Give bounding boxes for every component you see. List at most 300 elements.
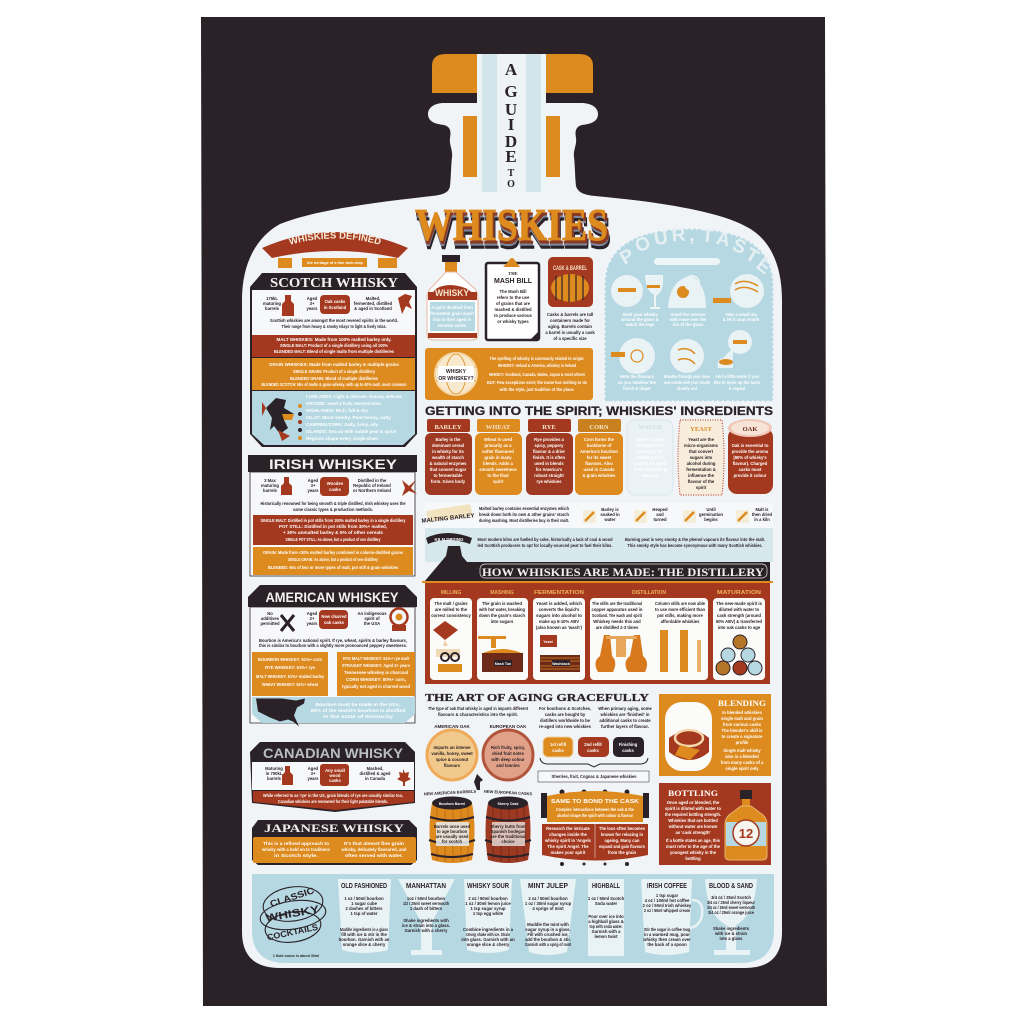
heading: irish whiskey [248, 455, 417, 472]
section: scotch regions with map: SPEYSIDE: Sweet & fruity. Honeyed notes [306, 401, 382, 406]
title ribbon: A Guide To: G [504, 82, 518, 101]
text and pot stills: Scotland. The wash and spirit [592, 613, 643, 618]
jar: rye: RYE [542, 424, 556, 431]
text: japanese note: often served with water. [345, 853, 403, 858]
icon: cask and barrels: a barrel is usually a cask [545, 330, 595, 335]
circle: european oak: dried fruit notes [492, 751, 525, 756]
jar: wheat: smooth sweetness [479, 467, 517, 472]
section: single malt and pot still: + 30% unmalted barley & 5% of other cereals [283, 530, 384, 535]
icon: cask the cask text panel: alcohol shape the spirit with colour & flavour [557, 813, 633, 818]
icon: whisky bottle label: WHISKY [435, 288, 469, 298]
step 2 illustration [668, 276, 707, 327]
barrel: european oak barrel: are the traditional [490, 834, 526, 839]
barrel: american oak barrel [424, 789, 476, 863]
circle: european oak: and tannins [496, 763, 520, 768]
malting steps: in a kiln [754, 517, 770, 522]
column: mashing: down the grain's starch [479, 613, 525, 618]
section: american styles right: Tennessee whiskey is charcoal [344, 670, 408, 675]
icon: arrow between circles and barrels [474, 774, 483, 790]
jar: rye: for America's [536, 467, 563, 472]
step 3 illustration [713, 274, 764, 322]
step 1 illustration: Swirl your whisky [622, 312, 658, 317]
jar: wheat: grain in many [484, 455, 512, 460]
column: maturation: The new-made spirit is [716, 601, 763, 606]
jar: corn: America's bourbon [580, 449, 618, 454]
section: american map and note: Bourbon must be made in the USA, [316, 702, 400, 707]
title ribbon: A Guide To: A [505, 60, 518, 79]
cocktail: mint julep: 2 oz / 50ml bourbon [528, 896, 568, 901]
icon row: american facts: An indigenous [357, 611, 387, 616]
icon: globe [435, 353, 477, 395]
icon row: irish facts: 3 Max [264, 478, 276, 483]
icon: mash bill clipboard: mashed & distilled [494, 307, 532, 312]
column: maturation: cask strength (around [717, 613, 761, 618]
jar: water: mashing, for [637, 449, 663, 454]
step 1 illustration [611, 275, 662, 327]
text: japanese note: whisky with a hold on to traditions [261, 847, 331, 852]
text: spelling explanation: WHISKY: Scotland, Canada, Wales, Japan & most others [489, 372, 586, 377]
text: oak types intro [428, 706, 529, 717]
icon row: irish facts: or Northern Ireland [353, 488, 391, 493]
jar: barley: BARLEY [434, 424, 462, 431]
barrel: american oak barrel: for scotch [442, 839, 463, 844]
section: american map and note: 95% of the world's bourbon is distilled [310, 708, 406, 713]
cocktail: mint julep [520, 879, 576, 955]
step 1 illustration: watch the legs [625, 322, 655, 327]
jar: rye: robust straight [534, 473, 564, 478]
malting steps: then dried [752, 512, 773, 517]
text: spelling explanation: The spelling of whisky is commonly related to origin: [490, 356, 584, 361]
barrel: european oak barrel: Sherry Cask [498, 802, 518, 806]
text and column stills: Column stills are now able [655, 601, 706, 606]
barrel: european oak barrel: Sherry butts from [490, 824, 526, 829]
malting steps [583, 507, 773, 523]
cocktail: blood and sand [705, 879, 757, 955]
icon row: canadian facts: Maturing [265, 766, 283, 771]
icon row: canadian facts: distilled & aged [360, 771, 391, 776]
jar: oak: OAK [743, 426, 757, 433]
intro text [270, 318, 398, 329]
section: grain whiskies: BLENDED SCOTCH: Mix of malts & grain whisky, with up to 40% malt, most common [262, 382, 407, 387]
emblem: classic whisky cocktails: CLASSIC [269, 885, 316, 909]
text: bottling notes [665, 800, 721, 861]
icon row: canadian facts: barrels [267, 776, 282, 781]
text: casks intro: further layers of flavour. [601, 724, 649, 729]
cocktail: manhattan: 1oz / 50ml bourbon [407, 896, 446, 901]
heading: pour, taste: T [741, 244, 762, 268]
jar: oak: (80% of whisky's [733, 455, 767, 460]
malting steps: Malt is [755, 507, 769, 512]
panel: scotch whisky [250, 273, 417, 447]
text: bottling notes: must refer to the age of the [666, 844, 721, 849]
icon row: scotch facts: & aged in Scotland [354, 306, 392, 311]
text: spelling explanation [487, 356, 587, 392]
section: american styles left: RYE WHISKEY: 51%+ rye [265, 665, 316, 670]
icon row: canadian facts: Mashed, [367, 766, 383, 771]
malting steps: germination [699, 512, 723, 517]
malting steps: Heaped [652, 507, 668, 512]
jar: water: WATER [638, 424, 662, 431]
jar: rye: Rye provides a [534, 437, 565, 442]
intro text: Historically renowned for being smooth & triple distilled, Irish whiskey uses the [260, 501, 406, 506]
jar: wheat: softer flavoured [482, 449, 514, 454]
jar: corn: backbone of [587, 443, 612, 448]
cocktail: blood and sand: 3/4 oz / 25ml cherry liqueur [707, 900, 755, 905]
icon row: irish facts: 3+ [311, 483, 316, 488]
circle: american oak: flavours [444, 763, 461, 768]
icon row: american facts: oak casks [324, 620, 345, 625]
section: american styles right: CORN WHISKEY: 80%+ corn, [346, 677, 406, 682]
jar: barley: Barley is the [436, 437, 461, 442]
icon: whisky bottle label: A spirit distilled from [431, 305, 473, 310]
jar: oak: casks must [739, 467, 762, 472]
icon row: canadian facts [265, 764, 411, 786]
title: Whiskies: WHISKIES [417, 207, 611, 258]
icon: cask and barrels: Casks & barrels are tall [547, 312, 593, 317]
text: japanese note: It's that almost fine grain [344, 841, 405, 846]
text: kiln left: Most modern kilns are fuelled by coke, historically a lack of coal & wood [478, 537, 613, 542]
icon: cask the cask text panel: whisky spirit in 'Angels [544, 838, 592, 843]
malting steps: and [656, 512, 664, 517]
cocktail: irish coffee: 1 tsp sugar [656, 893, 679, 898]
text: oak types intro: flavours & characteristics into the spirit. [438, 712, 518, 717]
stamp: malting barley: MALTING BARLEY [421, 513, 475, 525]
jar: corn [575, 419, 623, 495]
cocktail: old fashioned: 2 dashes of bitters [345, 906, 383, 911]
text: bottling notes: the required bottling strength. [665, 812, 721, 817]
intro text: Their range from heavy & smoky Islays to light & lively Islas. [282, 324, 386, 329]
cocktail: blood and sand: Shake ingredients [713, 926, 750, 931]
column: fermentation [533, 590, 585, 680]
column: fermentation: Yeast [543, 640, 553, 644]
jar: rye: flavour & a drier [533, 449, 565, 454]
intro text [259, 638, 407, 648]
column: milling: are milled to the [435, 607, 468, 612]
icon: kiln pagoda [424, 533, 484, 582]
circle: european oak: with deep colour [490, 757, 525, 762]
cocktail: manhattan: 1/2 / 25ml sweet vermouth [403, 901, 449, 906]
icon row: scotch facts: years [307, 306, 318, 311]
intro text: same classic types & production methods. [293, 507, 373, 512]
jar: corn: & grain whiskies [582, 473, 616, 478]
heading: pour, taste: R [671, 225, 686, 246]
cocktail: whisky sour: strong shake with ice. Strain [466, 932, 510, 937]
cocktail: highball: Garnish with a [592, 929, 621, 934]
cocktail: manhattan: ice & strain into a glass. [402, 923, 450, 928]
intro text [260, 501, 406, 512]
icon: whisky bottle label: wooden casks [437, 323, 467, 328]
icon row: american facts: No [267, 611, 273, 616]
circle: european oak: Rich fruity, spicy, [491, 745, 525, 750]
icon row: scotch facts: 3+ [310, 301, 315, 306]
cocktail: manhattan: 1 dash of bitters [410, 906, 443, 911]
column: fermentation: FERMENTATION [534, 590, 584, 596]
icon: cask the cask text panel: ageing. Many can [605, 838, 640, 843]
section: scotch regions with map: ISLAY: Most smoky. Peat-heavy, salty [306, 415, 392, 420]
cocktail: manhattan: MANHATTAN [406, 883, 446, 890]
emblem: classic whisky cocktails [258, 883, 328, 958]
jar: water: down to bottling [634, 467, 667, 472]
section: grain and blended: BLENDED: Mix of two or more types of malt, pot still & grain whiskies [268, 565, 399, 570]
cocktail: old fashioned [338, 879, 391, 953]
step 2 illustration: with nose over the [669, 317, 707, 322]
text and pot stills: Whiskey needs this and [593, 619, 641, 624]
intro text: Scottish whiskies are amongst the most revered spirits in the world. [270, 318, 398, 323]
bottle silhouette [242, 103, 782, 968]
column: fermentation: Yeast is added, which [536, 601, 582, 606]
jar: yeast: fermentation & [686, 467, 716, 472]
cocktail: mint julep: Garnish with a sprig of mint [525, 942, 572, 947]
jar: rye: used in blends [534, 461, 564, 466]
jar: oak: flavour). Charged [733, 461, 768, 466]
malting steps: turned [653, 517, 667, 522]
text: blending notes: single malt and grain [721, 716, 763, 721]
text: bottling notes: as 'cask strength' [675, 830, 711, 835]
panel: blending [659, 694, 771, 776]
jar: barley: dominant cereal [432, 443, 464, 448]
jar: yeast: spirit [696, 485, 707, 490]
column: maturation: diluted with water to [719, 607, 760, 612]
heading: pour, taste: P [617, 245, 638, 270]
text: malting description [479, 506, 569, 523]
jar: rye: finish. It is often [533, 455, 565, 460]
cocktail: irish coffee: 4 oz / 100ml hot coffee [645, 898, 690, 903]
section: american styles right: STRAIGHT WHISKEY: Aged 2+ years [342, 663, 411, 668]
icon row: american facts: spirit of [364, 616, 380, 621]
barrel: american oak barrel: are usually used [436, 834, 469, 839]
jar: yeast: flavour of the [688, 479, 715, 484]
step 6 illustration: Add a little water if you [715, 374, 759, 379]
section: american styles right: RYE MALT WHISKEY: 51%+ rye malt [343, 656, 410, 661]
cocktail: whisky sour: 1 tsp egg white [473, 911, 504, 916]
jar: water: strength [642, 473, 659, 478]
text: kiln right: This smoky style has become synonymous with many Scottish whiskies. [628, 543, 762, 548]
text: spelling explanation: BUT: Few exceptions exist; the name has nothing to do [487, 380, 587, 385]
panel: american whiskey [248, 585, 417, 726]
cask finish pills [538, 737, 649, 782]
step 5 illustration: Breathe through your nose [664, 374, 711, 379]
column: distillation [590, 590, 708, 680]
text: spelling explanation: WHISKEY: Ireland & America, whiskey in Ireland [498, 363, 576, 368]
icon: mash bill clipboard: THE [508, 271, 518, 276]
emblem: classic whisky cocktails: 1 fluid ounce is about 30ml [273, 954, 319, 958]
icon row: scotch facts: in Scotland [324, 305, 347, 310]
jar: barley: in whisky for its [432, 449, 464, 454]
heading: pour, taste: A [714, 228, 733, 251]
text: bottling notes: Whiskies that are bottled [668, 818, 718, 823]
panel: canadian whisky [250, 742, 415, 812]
section: grain whiskies: SINGLE GRAIN: Product of a single distillery [293, 369, 376, 374]
panel: japanese whisky [252, 820, 417, 865]
circle: american oak [427, 724, 477, 780]
cocktail: old fashioned: orange slice & cherry [343, 942, 386, 947]
heading: american whiskey: AMERICAN WHISKEY [266, 589, 399, 605]
column: maturation: 60% ABV) & transferred [716, 619, 762, 624]
heading: japanese whisky: JAPANESE WHISKY [264, 823, 405, 835]
section: american styles left [252, 652, 328, 696]
text and column stills: to use more efficient than [655, 607, 705, 612]
cocktail: blood and sand: into a glass [719, 936, 743, 941]
icon: whisky tumbler [665, 702, 712, 771]
cocktail: blood and sand: 3/4 oz / 25ml Scotch [711, 895, 751, 900]
icon: cask and barrels: aging. Barrels contain [548, 324, 592, 329]
barrel: american oak barrel: NEW AMERICAN BARRELS [424, 789, 476, 796]
cocktail: highball [588, 879, 625, 956]
icon row: irish facts: Wooden [327, 481, 344, 486]
text: kiln right: Burning peat is very smoky & the phenol vapours its flavour into the malt. [625, 537, 765, 542]
jar: water: Water is used [636, 437, 664, 442]
icon row: canadian facts: in 700kL [266, 771, 283, 776]
barrel: european oak barrel: Spanish bodegas [491, 829, 526, 834]
text: blending notes: In blended whiskies [722, 710, 762, 715]
cocktail: whisky sour: into glass. Garnish with an [461, 937, 515, 942]
icon row: irish facts: barrels [263, 488, 278, 493]
section: single malt and pot still: POT STILL: Distilled in pot stills from 30%+ malted, [279, 524, 387, 529]
circle: european oak: EUROPEAN OAK [490, 724, 527, 729]
barrel: american oak barrel: Barrels once used [434, 824, 471, 829]
heading: american whiskey [248, 585, 417, 607]
step 4 illustration: as you swallow the [618, 380, 657, 385]
circle: american oak: AMERICAN OAK [434, 724, 470, 729]
text: casks intro [598, 706, 652, 729]
cocktail: mint julep: add the bourbon & stir. [525, 937, 571, 942]
icon: whisky bottle label: fermented grain mash [430, 311, 474, 316]
heading: bottling: BOTTLING [668, 788, 718, 798]
text: blending notes: from many casks of a [721, 760, 764, 765]
text and column stills: pot stills, making more [657, 613, 703, 618]
jar: barley: that convert sugar [430, 467, 467, 472]
title: Whiskies: WHISKIES [415, 199, 608, 250]
text: blending notes: also is a blended [725, 754, 759, 759]
panel: kiln drying [424, 528, 773, 582]
cocktail: mint julep: MINT JULEP [528, 883, 568, 890]
text: blending notes [721, 710, 764, 771]
text: bottling notes: without water are known [668, 824, 718, 829]
jar: barley: & natural enzymes [429, 461, 467, 466]
heading: pour, taste: T [701, 225, 715, 248]
icon row: scotch facts: maturing [263, 301, 281, 306]
section: scotch regions with map: HIGHLANDS: Rich, full & dry [306, 408, 369, 413]
text: blending notes: Single malt whisky [723, 748, 761, 753]
jar: water: throughout in [636, 443, 664, 448]
cocktail: mint julep: Fill with crushed ice, [527, 932, 569, 937]
cocktail: highball: HIGHBALL [592, 883, 621, 890]
icon: cask the cask text panel: from the grain [608, 850, 637, 855]
icon: mash bill clipboard: to produce various [494, 313, 533, 318]
cocktail: whisky sour: 1 tsp sugar syrup [471, 906, 506, 911]
icon row: scotch facts [263, 294, 412, 316]
section: grain and blended: GRAIN: Made from <30% malted barley combined in column-distilled grains [263, 550, 404, 555]
title ribbon: A Guide To [463, 54, 560, 192]
heading: pour, taste: U [652, 227, 670, 250]
text: japanese note: This is a refined approach to [263, 841, 330, 846]
text: blending notes: The blender's skill is [721, 728, 763, 733]
title: Whiskies: WHISKIES [416, 204, 610, 255]
column: mashing [477, 590, 528, 680]
icon row: american facts: Aged [307, 611, 318, 616]
cocktail: old fashioned: 1 oz / 50ml bourbon [344, 896, 384, 901]
column: fermentation: make up 8-10% ABV [539, 619, 579, 624]
panel: art of aging [424, 692, 652, 866]
cocktail: blood and sand: with ice & strain [714, 931, 747, 936]
section: scotch regions with map: Regions shape every single dram [306, 436, 378, 441]
jar: barley: form. Gives body [431, 479, 466, 484]
circle: european oak [483, 724, 533, 780]
jar: rye: rye whiskies [537, 479, 562, 484]
heading: pour, taste [617, 225, 775, 279]
column: milling [430, 590, 472, 680]
section: grain and blended [253, 547, 413, 575]
step 4 illustration [611, 338, 657, 391]
column: milling: MILLING [441, 590, 461, 596]
column: mashing: Mash Tun [495, 662, 511, 666]
jar: corn: CORN [589, 424, 609, 431]
text: cask age intro: For bourbons & Scotches, [539, 706, 591, 711]
section: american styles left: BOURBON WHISKEY: 51%+ corn [258, 657, 322, 662]
cask finish pills: 1st refill [550, 742, 566, 747]
section: grain whiskies: GRAIN WHISKIES: Made from malted barley & multiple grains [269, 362, 400, 367]
icon row: canadian facts: casks [329, 778, 341, 783]
text: cask age intro: re-aged into new whiskies [539, 724, 592, 729]
icon row: canadian facts: 3+ [311, 771, 316, 776]
text: cask age intro: distillers worldwide to be [540, 718, 591, 723]
text: canadian note: While referred to as 'rye' in the US, grain blends of rye are usually similar too, [263, 793, 403, 798]
text: casks intro: additional casks to create [599, 718, 651, 723]
section: american styles right [337, 652, 415, 696]
malting steps: water [604, 517, 616, 522]
icon: cask the cask text panel: The spirit Angel. The [547, 844, 589, 849]
text: blending notes: single spirit only [725, 766, 759, 771]
text: bottling notes: If a bottle states an age, this [666, 838, 721, 843]
cocktail: highball: 1 oz / 50ml Scotch [588, 896, 625, 901]
column: milling: The malt / grains [434, 601, 468, 606]
icon: mash bill clipboard [486, 258, 539, 340]
barrel: american oak barrel: to age bourbon [437, 829, 468, 834]
title ribbon: A Guide To: E [505, 147, 517, 166]
title ribbon: A Guide To: U [505, 100, 517, 119]
cocktail: manhattan: Shake ingredients with [403, 918, 449, 923]
barrel: european oak barrel: choice [501, 839, 515, 844]
column: milling: correct consistency [431, 613, 471, 618]
column: mashing: MASHING [490, 590, 514, 596]
icon: mash bill clipboard: or whisky types [497, 319, 529, 324]
column: fermentation: sugars into alcohol to [536, 613, 582, 618]
icon: cask and barrels: CASK & BARREL [553, 266, 587, 272]
cocktail: whisky sour: WHISKY SOUR [467, 883, 509, 890]
panel: bottling [659, 783, 771, 865]
section: malt whiskies: BLENDED MALT: Blend of single malts from multiple distilleries [274, 349, 395, 354]
section: grain whiskies: BLENDED GRAIN: Blend of multiple distilleries [290, 376, 379, 381]
heading: getting into the spirit: GETTING INTO THE SPIRIT; WHISKIES' INGREDIENTS [425, 406, 773, 418]
section: american map and note: in the state of Kentucky [323, 714, 394, 719]
subtitle pill [654, 258, 720, 265]
icon row: canadian facts: Any small [325, 768, 345, 773]
column: mashing: into sugars [491, 619, 514, 624]
tea towel background [201, 17, 827, 1006]
cocktail: whisky sour [461, 879, 515, 953]
icon row: canadian facts: Aged [308, 766, 319, 771]
cocktail: irish coffee: IRISH COFFEE [647, 883, 687, 890]
jar: barley [425, 419, 472, 495]
column: mashing: The grain is washed [482, 601, 522, 606]
section: american map and note [252, 697, 415, 726]
icon: mash bill clipboard: MASH BILL [494, 278, 533, 285]
title ribbon: A Guide To: D [505, 132, 517, 151]
heading: blending: BLENDING [718, 699, 766, 708]
icon: mash bill clipboard: of grains that are [496, 301, 531, 306]
text: kiln left: led Scottish producers to opt for locally-sourced peat to fuel their kilns. [478, 543, 612, 548]
text: blending notes: profile [736, 740, 749, 745]
